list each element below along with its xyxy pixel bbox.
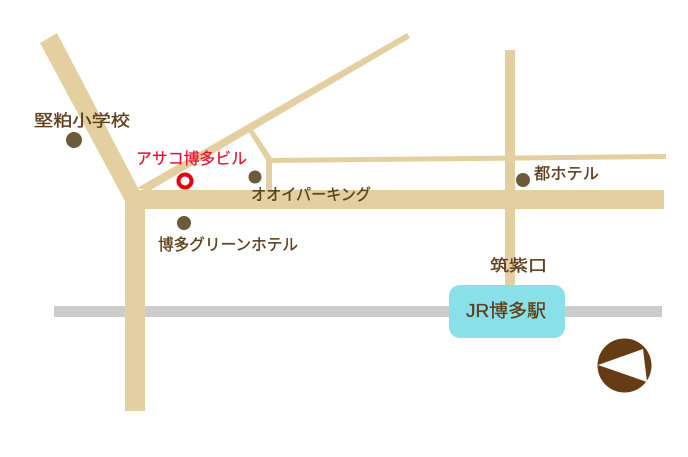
label: school: 堅粕小学校 xyxy=(34,112,130,130)
roads xyxy=(40,33,666,411)
road: main junction xyxy=(40,33,664,411)
road: thin horizontal xyxy=(266,154,666,163)
label: Hakata Green Hotel xyxy=(158,216,298,254)
label: Chikushi exit: 筑紫口 xyxy=(490,257,547,275)
road: thin diagonal xyxy=(137,33,410,191)
icon: compass xyxy=(598,338,652,392)
label: Miyako Hotel: 都ホテル xyxy=(534,165,599,183)
label: Ooi parking: オオイパーキング xyxy=(251,186,371,204)
label: Asako Hakata building: アサコ博多ビル xyxy=(136,150,247,168)
station: JR Hakata xyxy=(449,285,565,338)
label: school xyxy=(34,112,130,148)
road: north-south right xyxy=(505,50,515,290)
road: connector xyxy=(248,128,272,190)
rail line xyxy=(54,306,662,317)
label: Hakata Green Hotel: 博多グリーンホテル xyxy=(158,236,298,254)
label: Asako Hakata building xyxy=(136,150,247,188)
station: JR Hakata: JR博多駅 xyxy=(466,301,546,321)
label: Ooi parking xyxy=(248,170,371,204)
label: Miyako Hotel xyxy=(516,165,599,187)
